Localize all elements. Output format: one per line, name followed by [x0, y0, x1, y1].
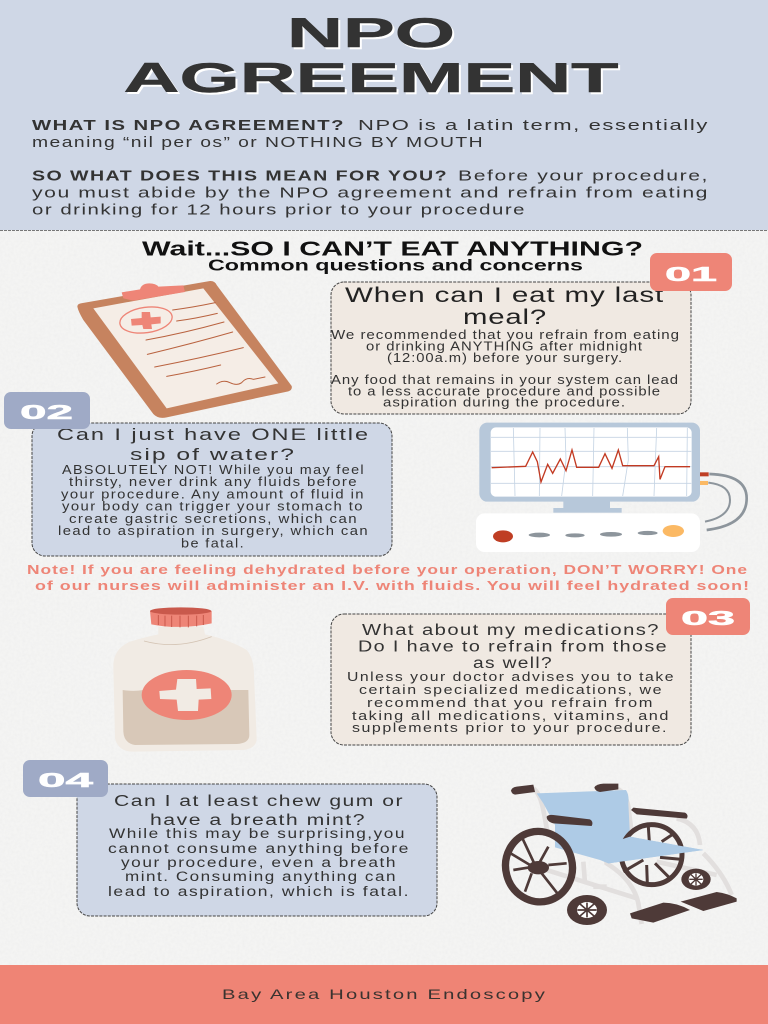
title: NPO: [289, 11, 457, 58]
text block: answer 3: recommend that you refrain from: [367, 696, 654, 710]
text block: answer 2: ABSOLUTELY NOT! While you may feel: [62, 463, 365, 477]
badge: 04: [23, 760, 108, 797]
text block: answer 2: [58, 463, 369, 550]
text block: answer 3: [347, 670, 675, 735]
text block: answer 3: Unless your doctor advises you to take: [347, 670, 675, 684]
text block: answer 2: lead to aspiration in surgery, which can: [58, 524, 369, 538]
text block: answer 1: We recommended that you refrain from eating: [331, 328, 680, 342]
text block: answer 4: lead to aspiration, which is fatal.: [108, 884, 410, 899]
text block: what this means: or drinking for 12 hours prior to your procedure: [32, 202, 526, 218]
text block: what is NPO: NPO is a latin term, essentially: [358, 117, 709, 134]
callout: dehydration note: of our nurses will administer an I.V. with fluids. You will feel hydrated soon!: [35, 579, 750, 593]
text block: what is NPO: [32, 117, 709, 151]
text block: answer 3: taking all medications, vitamins, and: [352, 709, 670, 723]
footer: Bay Area Houston Endoscopy: [222, 986, 547, 1002]
text block: answer 1: (12:00a.m) before your surgery.: [387, 351, 623, 365]
text block: what this means: SO WHAT DOES THIS MEAN FOR YOU?: [32, 168, 448, 184]
heading: medications: Do I have to refrain from those: [358, 638, 668, 656]
heading: sip of water: Can I just have ONE little: [57, 425, 370, 444]
footrests and grips: [630, 903, 690, 923]
text block: what this means: [32, 168, 709, 218]
text block: answer 1: Any food that remains in your system can lead: [331, 373, 679, 387]
small wheels: [567, 895, 607, 925]
text block: answer 3: certain specialized medications, we: [359, 683, 663, 697]
panel: question 3: [331, 614, 691, 745]
footer: [0, 965, 768, 1024]
near wheel: [498, 824, 580, 909]
text block: answer 3: supplements prior to your procedure.: [352, 721, 668, 735]
text block: answer 2: your procedure. Any amount of fluid in: [61, 488, 365, 502]
panel: header: [0, 0, 768, 230]
badge: 02: 02: [20, 402, 73, 424]
text block: answer 4: your procedure, even a breath: [121, 855, 397, 870]
icon: wheelchair: [498, 784, 737, 925]
text block: answer 4: mint. Consuming anything can: [125, 869, 397, 884]
heading: last meal: When can I eat my last: [345, 284, 664, 307]
heading: gum or mint: have a breath mint?: [150, 812, 366, 829]
text block: answer 1: aspiration during the procedure.: [383, 396, 626, 410]
badge: 03: 03: [681, 608, 735, 630]
text block: answer 2: create gastric secretions, which can: [69, 512, 358, 526]
heading: sip of water: [57, 425, 370, 464]
text block: answer 4: While this may be surprising,you: [109, 826, 406, 841]
panel: question 1: [331, 282, 691, 414]
badge: 04: 04: [38, 770, 95, 792]
far wheel: [621, 825, 682, 885]
text block: answer 1: [331, 328, 680, 410]
text block: answer 2: your body can trigger your stomach to: [62, 500, 364, 514]
badge: 01: 01: [665, 264, 717, 286]
text block: answer 2: be fatal.: [181, 536, 245, 550]
icon: clipboard: [77, 281, 292, 418]
seat: [537, 790, 703, 863]
badge: 02: [4, 392, 90, 429]
title: AGREEMENT: [126, 56, 621, 103]
heading: medications: as well?: [473, 655, 553, 672]
panel: question 4: [77, 784, 437, 916]
text block: what is NPO: WHAT IS NPO AGREEMENT?: [32, 117, 345, 134]
heading: sip of water: sip of water?: [130, 445, 296, 464]
text block: answer 1: or drinking ANYTHING after midnight: [366, 340, 643, 354]
heading: questions: Common questions and concerns: [208, 258, 583, 274]
heading: questions: [142, 238, 643, 274]
title: NPO: [287, 9, 455, 56]
text block: answer 4: cannot consume anything before: [108, 841, 410, 856]
text block: what is NPO: meaning “nil per os” or NOTHING BY MOUTH: [32, 134, 484, 151]
title: [124, 9, 621, 103]
text block: answer 1: to a less accurate procedure and possible: [348, 384, 661, 398]
icon: heart monitor: [476, 423, 747, 552]
text block: answer 2: thirsty, never drink any fluids before: [69, 475, 358, 489]
text block: answer 4: [108, 826, 410, 899]
title: AGREEMENT: [124, 54, 619, 101]
heading: medications: What about my medications?: [362, 622, 660, 639]
heading: gum or mint: [114, 793, 404, 829]
icon: medicine bottle: [113, 607, 257, 752]
text block: what this means: Before your procedure,: [458, 168, 709, 184]
badge: 03: [666, 598, 750, 635]
panel: question 2: [32, 423, 392, 556]
callout: dehydration note: [27, 563, 750, 593]
heading: last meal: [345, 284, 664, 329]
heading: gum or mint: Can I at least chew gum or: [114, 793, 404, 810]
heading: medications: [358, 622, 668, 672]
heading: questions: Wait...SO I CAN’T EAT ANYTHING?: [142, 238, 643, 260]
heading: last meal: meal?: [463, 306, 547, 329]
callout: dehydration note: Note! If you are feeling dehydrated before your operation, DON’T WORRY! One: [27, 563, 748, 577]
text block: what this means: you must abide by the NPO agreement and refrain from eating: [32, 184, 709, 202]
badge: 01: [650, 253, 732, 291]
